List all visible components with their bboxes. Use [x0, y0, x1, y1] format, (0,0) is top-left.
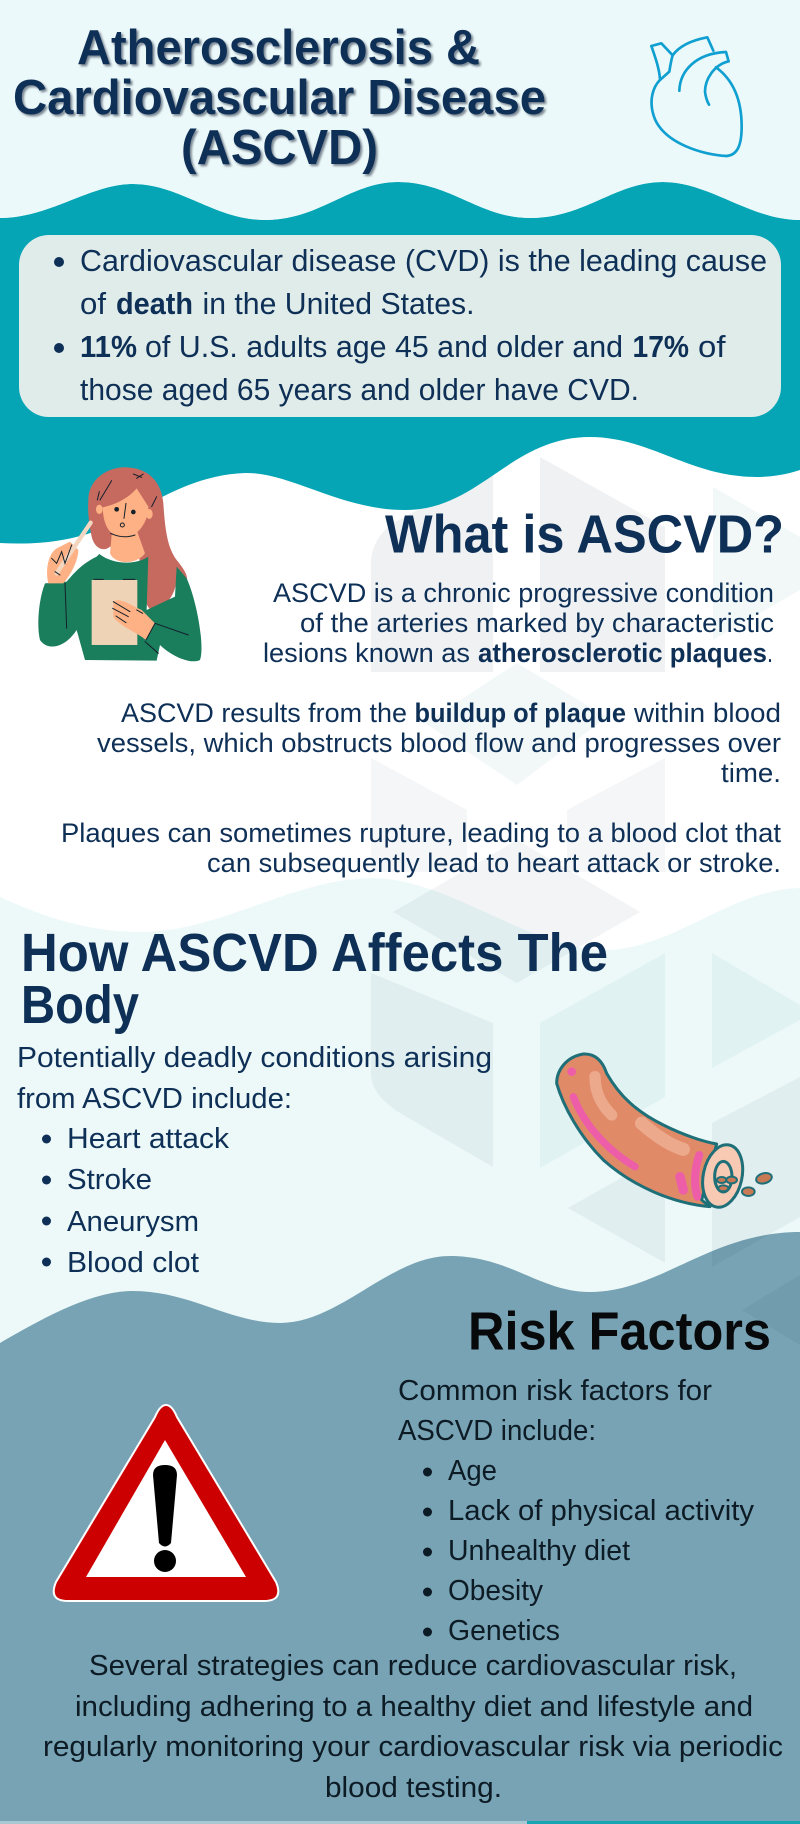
list: common risk factors: [398, 1375, 755, 1647]
text block: ASCVD definition: atherosclerotic plaques: [478, 638, 767, 668]
text block: buildup of plaque: vessels, which obstructs blood flow and progresses over: [97, 728, 781, 758]
text block: plaque rupture: can subsequently lead to heart attack or stroke.: [207, 848, 781, 878]
list: common risk factors: Genetics: [448, 1615, 560, 1647]
panel: intro statistics: in the United States.: [202, 287, 474, 321]
text block: ASCVD definition: lesions known as: [263, 638, 470, 668]
list: common risk factors: Age: [448, 1455, 497, 1487]
top header background: [0, 0, 800, 220]
heading: how ASCVD affects the body: How ASCVD Affects The: [21, 923, 608, 983]
list: common risk factors: Obesity: [448, 1575, 543, 1607]
title: (ASCVD): [181, 120, 378, 175]
pale section background: how ASCVD affects the body: [0, 878, 800, 1824]
panel: intro statistics: of U.S. adults age 45 and older and: [145, 330, 623, 364]
text block: ASCVD definition: of the arteries marked by characteristic: [300, 608, 774, 638]
list: deadly conditions: Blood clot: [67, 1247, 199, 1279]
text block: buildup of plaque: within blood: [633, 698, 781, 728]
panel: intro statistics: those aged 65 years and older have CVD.: [80, 373, 639, 407]
heading: what is ASCVD: What is ASCVD?: [385, 504, 784, 564]
text block: buildup of plaque: buildup of plaque: [414, 698, 626, 728]
panel: intro statistics: 11%: [80, 330, 137, 364]
text block: plaque rupture: Plaques can sometimes rupture, leading to a blood clot that: [61, 818, 781, 848]
icon: heart outline: [651, 37, 742, 156]
panel: intro statistics: Cardiovascular disease (CVD) is the leading cause: [80, 244, 767, 278]
panel: intro statistics: death: [116, 287, 193, 321]
heading: how ASCVD affects the body: Body: [21, 975, 139, 1035]
list: deadly conditions: Potentially deadly conditions arising: [17, 1042, 492, 1074]
text block: reducing risk: Several strategies can reduce cardiovascular risk,: [89, 1650, 737, 1682]
panel: intro statistics: [19, 235, 781, 417]
text block: reducing risk: regularly monitoring your cardiovascular risk via periodic: [43, 1731, 783, 1763]
title: Cardiovascular Disease: [13, 70, 546, 125]
text block: buildup of plaque: ASCVD results from the: [121, 698, 407, 728]
heading: how ASCVD affects the body: [21, 923, 608, 1035]
icon: woman with notepad and pencil: [38, 467, 201, 661]
title: Atherosclerosis &: [77, 20, 480, 75]
text block: reducing risk: [43, 1650, 783, 1804]
heading: risk factors: Risk Factors: [468, 1302, 771, 1362]
list: common risk factors: ASCVD include:: [398, 1415, 596, 1447]
panel: intro statistics: 17%: [632, 330, 689, 364]
text block: buildup of plaque: [97, 698, 781, 788]
panel: intro statistics: of: [80, 287, 107, 321]
list: deadly conditions: Aneurysm: [67, 1206, 199, 1238]
icon: warning triangle: [54, 1405, 278, 1601]
icon: artery with plaque: [557, 1054, 773, 1211]
teal intro band: [0, 182, 800, 544]
text block: reducing risk: including adhering to a healthy diet and lifestyle and: [75, 1691, 753, 1723]
text block: ASCVD definition: ASCVD is a chronic progressive condition: [273, 578, 774, 608]
title: [13, 20, 546, 175]
list: deadly conditions: Stroke: [67, 1164, 152, 1196]
bottom edge strip: [0, 1821, 800, 1824]
steel blue section background: risk factors: [0, 1232, 800, 1821]
list: deadly conditions: [17, 1042, 492, 1279]
list: common risk factors: Unhealthy diet: [448, 1535, 630, 1567]
text block: ASCVD definition: .: [767, 638, 773, 668]
text block: plaque rupture: [61, 818, 781, 878]
text block: ASCVD definition: [263, 578, 774, 668]
text block: buildup of plaque: time.: [721, 758, 781, 788]
list: common risk factors: Common risk factors for: [398, 1375, 712, 1407]
list: deadly conditions: from ASCVD include:: [17, 1083, 292, 1115]
list: common risk factors: Lack of physical activity: [448, 1495, 755, 1527]
panel: intro statistics: of: [698, 330, 726, 364]
list: deadly conditions: Heart attack: [67, 1123, 230, 1155]
text block: reducing risk: blood testing.: [325, 1772, 502, 1804]
hexagon watermark pattern: [371, 457, 800, 1345]
